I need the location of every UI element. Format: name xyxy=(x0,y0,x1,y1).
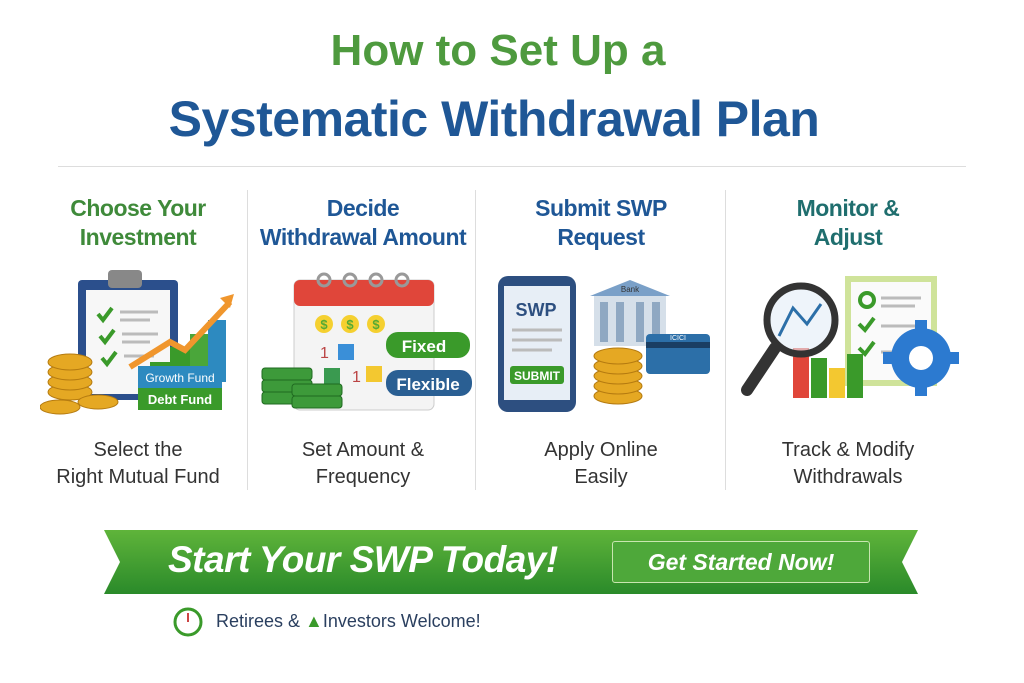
caption 1: Select the xyxy=(94,439,182,461)
icon: phone and bank: SUBMIT xyxy=(514,369,561,383)
icon: calendar: 1 xyxy=(320,345,329,362)
heading: choose investment: Choose Your xyxy=(70,195,206,221)
caption 3: Easily xyxy=(574,466,628,488)
icon: calendar: 1 xyxy=(352,369,361,386)
button: Get Started Now! xyxy=(648,549,834,575)
icon: calendar: Flexible xyxy=(396,375,460,394)
title line 1: How to Set Up a xyxy=(331,26,665,75)
caption 2: Frequency xyxy=(316,466,410,488)
icon: calendar: $ xyxy=(372,317,380,332)
footer note xyxy=(174,608,481,636)
icon: phone and bank: Bank xyxy=(621,285,640,294)
icon: calendar: $ xyxy=(346,317,354,332)
heading: monitor xyxy=(797,195,900,250)
heading: decide amount xyxy=(260,195,466,250)
heading: submit: Request xyxy=(557,224,645,250)
caption 1: Right Mutual Fund xyxy=(56,466,220,488)
caption 4 xyxy=(782,439,914,488)
heading: monitor: Monitor & xyxy=(797,195,899,221)
heading: submit: Submit SWP xyxy=(535,195,667,221)
icon: calendar xyxy=(262,272,472,410)
icon: clipboard and funds: Growth Fund xyxy=(145,371,215,385)
icon: phone and bank xyxy=(498,276,710,412)
banner text: Start Your SWP Today! xyxy=(168,539,558,580)
icon: phone and bank: SWP xyxy=(515,300,557,320)
icon: clipboard and funds: Debt Fund xyxy=(148,392,212,407)
icon: phone and bank: ICICI xyxy=(670,335,686,342)
icon: clipboard and funds xyxy=(40,270,234,414)
heading: choose investment: Investment xyxy=(80,224,196,250)
icon: calendar: Fixed xyxy=(402,337,446,356)
icon: calendar: $ xyxy=(320,317,328,332)
caption 3: Apply Online xyxy=(544,439,658,461)
caption 3 xyxy=(544,439,658,488)
footer note: Retirees & ▲Investors Welcome! xyxy=(216,611,481,631)
banner xyxy=(104,530,918,594)
caption 2: Set Amount & xyxy=(302,439,424,461)
heading: submit xyxy=(535,195,667,250)
title line 2: Systematic Withdrawal Plan xyxy=(169,91,819,147)
button xyxy=(612,541,870,583)
caption 2 xyxy=(302,439,424,488)
icon: magnifier chart gear xyxy=(741,276,959,398)
caption 1 xyxy=(56,439,220,488)
heading: decide amount: Decide xyxy=(327,195,399,221)
heading: decide amount: Withdrawal Amount xyxy=(260,224,466,250)
caption 4: Track & Modify xyxy=(782,439,914,461)
caption 4: Withdrawals xyxy=(794,466,902,488)
heading: monitor: Adjust xyxy=(814,224,882,250)
heading: choose investment xyxy=(70,195,206,250)
